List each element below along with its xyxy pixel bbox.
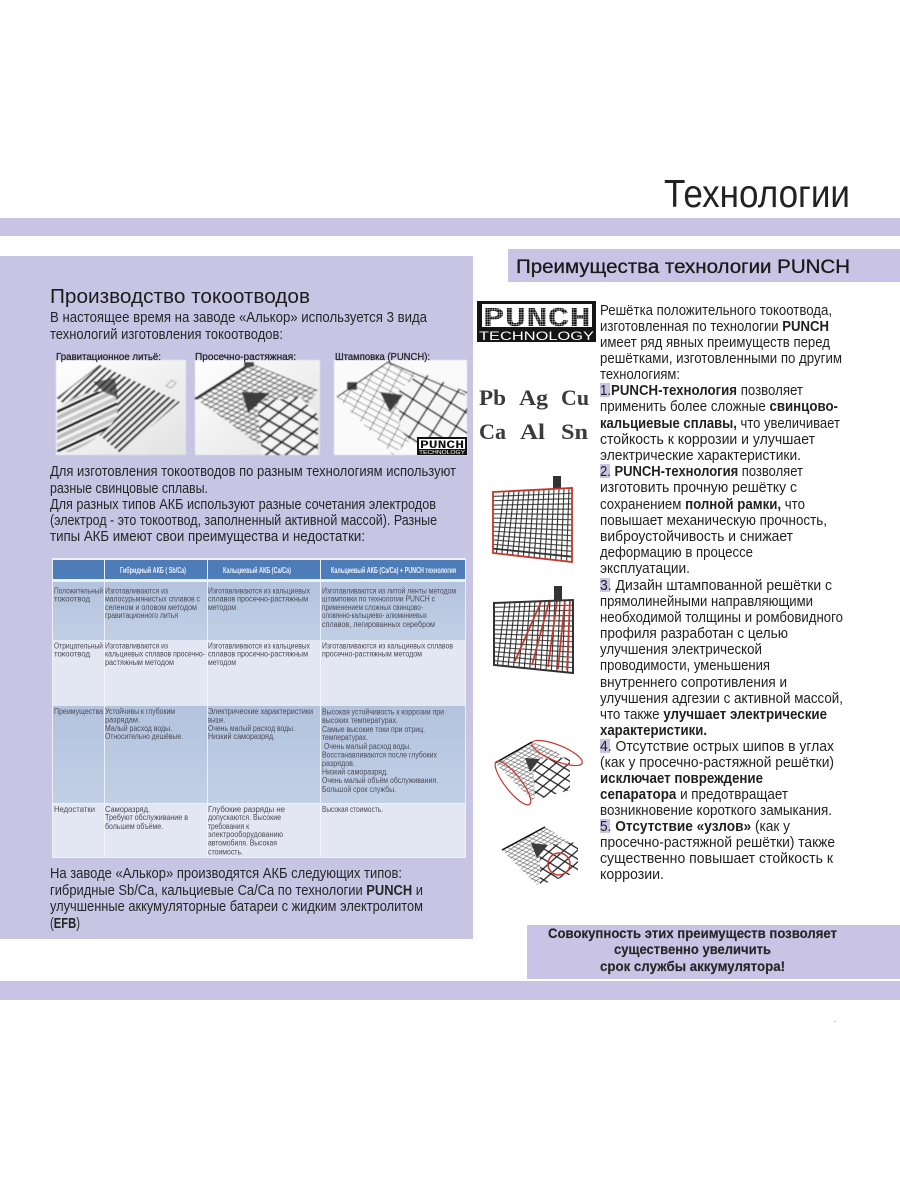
table row: advantages: Электрические характеристики [208, 707, 313, 716]
table row: negative: Изготавливаются из [105, 642, 168, 650]
table row: advantages: Очень малый объём обслуживания. [322, 776, 438, 785]
text: battery types produced: На заводе «Алькор» производятся АКБ следующих типов: [50, 866, 402, 882]
table row: disadvantages: Глубокие разряды не [208, 805, 286, 814]
intro text [50, 310, 428, 343]
text: PUNCH advantages list: необходимой толщины и ромбовидного [600, 610, 843, 626]
text: PUNCH advantages list: прямолинейными направляющими [600, 594, 813, 610]
photo: expanded mesh grid [195, 352, 320, 455]
text: PUNCH advantages list: технологиям: [600, 367, 680, 383]
table row: advantages: Высокая устойчивость к коррозии при [322, 708, 444, 716]
text: PUNCH advantages list: решётками, изготовленными по другим [600, 351, 842, 367]
label: gravity casting: Гравитационное литьё: [56, 352, 161, 363]
table row: negative: Изготавливаются из кальциевых сплавов [322, 642, 453, 650]
table row: advantages: Низкий саморазряд. [322, 768, 388, 776]
small PUNCH logo: PUNCH [420, 440, 464, 452]
table row: disadvantages: требования к [208, 822, 249, 831]
panel: production of current collectors [0, 256, 473, 939]
text: PUNCH advantages list: 5. Отсутствие «узлов» (как у [600, 819, 791, 835]
text: PUNCH advantages list: профиля разработан с целью [600, 626, 788, 642]
table row: advantages: Очень малый расход воды. [324, 742, 411, 751]
table row: advantages: Преимущества [54, 707, 103, 716]
small PUNCH logo [417, 437, 467, 456]
heading bar: PUNCH advantages: Преимущества технологии PUNCH [516, 257, 850, 278]
table row: negative: просечно-растяжным методом [322, 650, 422, 658]
table row: positive: оловянно-кальциево- алюминиевых [322, 611, 427, 620]
text: alloys and electrodes: разные свинцовые сплавы. [50, 481, 208, 497]
text: PUNCH advantages list: исключает повреждение [600, 771, 763, 787]
small PUNCH logo: TECHNOLOGY [419, 450, 466, 456]
text: PUNCH advantages list: существенно повышает стойкость к [600, 851, 834, 867]
table row: positive: штамповки по технологии PUNCH с [322, 594, 435, 604]
table row: negative: сплавов просечно-растяжным [208, 650, 308, 658]
table header: Кальциевый АКБ (Ca/Ca) [223, 566, 291, 575]
table row: advantages: Самые высокие токи при отриц. [322, 725, 425, 734]
text: PUNCH advantages list: проводимости, уменьшения [600, 658, 770, 674]
table row: positive: Изготавливаются из [105, 586, 168, 596]
element symbols: alloy components: Ag [519, 385, 548, 410]
top band [0, 218, 900, 236]
intro text: технологий изготовления токоотводов: [50, 327, 283, 343]
table row: positive [54, 586, 456, 629]
text: PUNCH advantages list: 3. Дизайн штампованной решётки с [600, 578, 832, 594]
table row: negative: кальциевых сплавов просечно- [105, 650, 205, 658]
text: PUNCH advantages list: характеристики. [600, 723, 707, 739]
text: PUNCH advantages list [600, 303, 843, 883]
text: PUNCH advantages list: просечно-растяжной решётки) также [600, 835, 835, 851]
diagram: grid with straight conductors highlighted in red [494, 586, 573, 673]
table row: disadvantages: допускаются. Высокие [208, 813, 281, 822]
text: PUNCH advantages list: коррозии. [600, 867, 664, 883]
table row: advantages: высоких температурах. [322, 716, 398, 725]
table row: advantages [54, 707, 444, 794]
text: alloys and electrodes: Для разных типов АКБ используют разные сочетания электродов [50, 497, 436, 513]
table row: advantages: температурах. [322, 733, 368, 742]
diagram: grid with full frame highlighted in red [493, 476, 572, 562]
text: . [834, 1015, 836, 1024]
text: PUNCH advantages list: имеет ряд явных преимуществ перед [600, 335, 830, 351]
diagram: mesh with no sharp corner spikes [490, 735, 585, 809]
text: PUNCH advantages list: 1.PUNCH-технология позволяет [600, 383, 803, 399]
icon: PUNCH Technology logo: PUNCH [483, 305, 591, 335]
table row: advantages: Низкий саморазряд. [208, 732, 275, 741]
text: PUNCH advantages list: внутреннего сопротивления и [600, 675, 787, 691]
icon: PUNCH Technology logo: TECHNOLOGY [479, 329, 594, 343]
callout: service life [527, 925, 900, 979]
element symbols: alloy components [479, 385, 589, 444]
text: PUNCH advantages list: сохранением полной рамки, что [600, 497, 805, 513]
table row: negative [54, 642, 453, 667]
table row: negative: растяжным методом [105, 658, 174, 667]
callout: service life: срок службы аккумулятора! [600, 958, 785, 974]
table row: advantages: разрядам. [105, 716, 140, 724]
page title: Технологии [664, 173, 850, 216]
table row: advantages: Относительно дешёвые. [105, 732, 183, 741]
table row: positive: токоотвод [54, 594, 90, 604]
table row: disadvantages: электрооборудованию [208, 830, 283, 839]
table row: negative: токоотвод [54, 650, 90, 658]
text: PUNCH advantages list: улучшения электрической [600, 642, 762, 658]
text: PUNCH advantages list: виброустойчивость и снижает [600, 529, 793, 545]
text: PUNCH advantages list: улучшения адгезии с активной массой, [600, 691, 843, 707]
table row: advantages: Очень малый расход воды. [208, 724, 295, 733]
text: alloys and electrodes [50, 464, 456, 545]
table row: disadvantages: Недостатки [54, 805, 95, 814]
text: PUNCH advantages list: стойкость к коррозии и улучшает [600, 432, 815, 448]
table row: positive: гравитационного литья [105, 611, 178, 620]
table row: disadvantages: Саморазряд. [105, 805, 150, 814]
table row: positive: малосурьмянистых сплавов с [105, 594, 200, 604]
text: alloys and electrodes: (электрод - это токоотвод, заполненный активной массой). Разные [50, 513, 437, 529]
table header [120, 566, 456, 575]
element symbols: alloy components: Ca [479, 419, 506, 444]
text: PUNCH advantages list: кальциевые сплавы, что увеличивает [600, 416, 840, 432]
table row: disadvantages: большем объёме. [105, 822, 163, 831]
table row: positive: сплавов просечно-растяжным [208, 594, 308, 604]
table row: positive: Изготавливаются из кальциевых [208, 586, 310, 596]
heading: production: Производство токоотводов [50, 286, 310, 308]
table row: positive: применением сложных свинцово- [322, 603, 423, 612]
bottom band [0, 981, 900, 1000]
text: PUNCH advantages list: электрические характеристики. [600, 448, 801, 464]
heading bar: PUNCH advantages [508, 249, 900, 282]
callout: service life: Совокупность этих преимуществ позволяет [548, 925, 837, 941]
table row: positive: Изготавливаются из литой ленты методом [322, 586, 456, 596]
table row: negative: Отрицательный [54, 642, 103, 650]
text: PUNCH advantages list: повышает механическую прочность, [600, 513, 827, 529]
table row: advantages: Устойчивы к глубоким [105, 707, 175, 716]
text: PUNCH advantages list: 4. Отсутствие острых шипов в углах [600, 739, 835, 755]
table row: positive: методом [208, 603, 236, 612]
text: PUNCH advantages list: Решётка положительного токоотвода, [600, 303, 832, 319]
text: PUNCH advantages list: изготовить прочную решётку с [600, 480, 797, 496]
intro text: В настоящее время на заводе «Алькор» используется 3 вида [50, 310, 428, 326]
table: battery type comparison [52, 558, 466, 858]
element symbols: alloy components: Al [520, 419, 545, 444]
text: PUNCH advantages list: эксплуатации. [600, 561, 690, 577]
text: PUNCH advantages list: 2. PUNCH-технология позволяет [600, 464, 803, 480]
table row: advantages: Малый расход воды. [105, 724, 172, 733]
text: PUNCH advantages list: возникновение короткого замыкания. [600, 803, 832, 819]
table row: disadvantages [54, 805, 383, 856]
table row: advantages: разрядов. [322, 759, 355, 768]
text: PUNCH advantages list: изготовленная по технологии PUNCH [600, 319, 829, 335]
element symbols: alloy components: Sn [561, 419, 588, 444]
text: PUNCH advantages list: применить более сложные свинцово- [600, 399, 838, 415]
text: battery types produced: улучшенные аккумуляторные батареи с жидким электролитом [50, 899, 423, 915]
diagram: mesh with no knots [502, 827, 578, 885]
table row: advantages: выше. [208, 716, 225, 724]
table row: positive: сплавов, легированных серебром [322, 620, 435, 629]
text: PUNCH advantages list: (как у просечно-растяжной решётки) [600, 755, 834, 771]
table row: advantages: Восстанавливаются после глубоких [322, 750, 437, 760]
photo: stamped PUNCH grid [334, 352, 467, 456]
table row: disadvantages: Высокая стоимость. [322, 805, 383, 814]
element symbols: alloy components: Cu [561, 385, 589, 410]
callout: service life: существенно увеличить [614, 941, 771, 957]
label: stamping: Штамповка (PUNCH): [335, 352, 430, 363]
text: alloys and electrodes: Для изготовления токоотводов по разным технологиям используют [50, 464, 456, 480]
table row: disadvantages: Требуют обслуживание в [105, 813, 188, 822]
text: battery types produced: (EFB) [50, 916, 80, 932]
table row: negative: Изготавливаются из кальциевых [208, 642, 310, 650]
text: alloys and electrodes: типы АКБ имеют свои преимущества и недостатки: [50, 529, 365, 545]
table header: Гибридный АКБ ( Sb/Ca) [120, 566, 186, 575]
photo: gravity casting grid [56, 352, 186, 455]
element symbols: alloy components: Pb [479, 385, 506, 410]
text: PUNCH advantages list: деформацию в процессе [600, 545, 753, 561]
text: PUNCH advantages list: сепаратора и предотвращает [600, 787, 788, 803]
table row: positive: селеном и оловом методом [105, 603, 197, 612]
text: battery types produced [50, 866, 423, 932]
table header: Кальциевый АКБ (Ca/Ca) + PUNCH технология [331, 566, 456, 575]
icon: PUNCH Technology logo [477, 301, 596, 343]
table row: advantages: Большой срок службы. [322, 785, 396, 794]
text: PUNCH advantages list: что также улучшает электрические [600, 707, 827, 723]
table row: disadvantages: автомобиля. Высокая [208, 838, 277, 848]
table row: positive: Положительный [54, 586, 103, 596]
label: expanded mesh: Просечно-растяжная: [195, 352, 296, 363]
table row: disadvantages: стоимость. [208, 848, 243, 856]
table row: negative: методом [208, 658, 236, 667]
text: battery types produced: гибридные Sb/Ca, кальциевые Ca/Ca по технологии PUNCH и [50, 883, 423, 899]
